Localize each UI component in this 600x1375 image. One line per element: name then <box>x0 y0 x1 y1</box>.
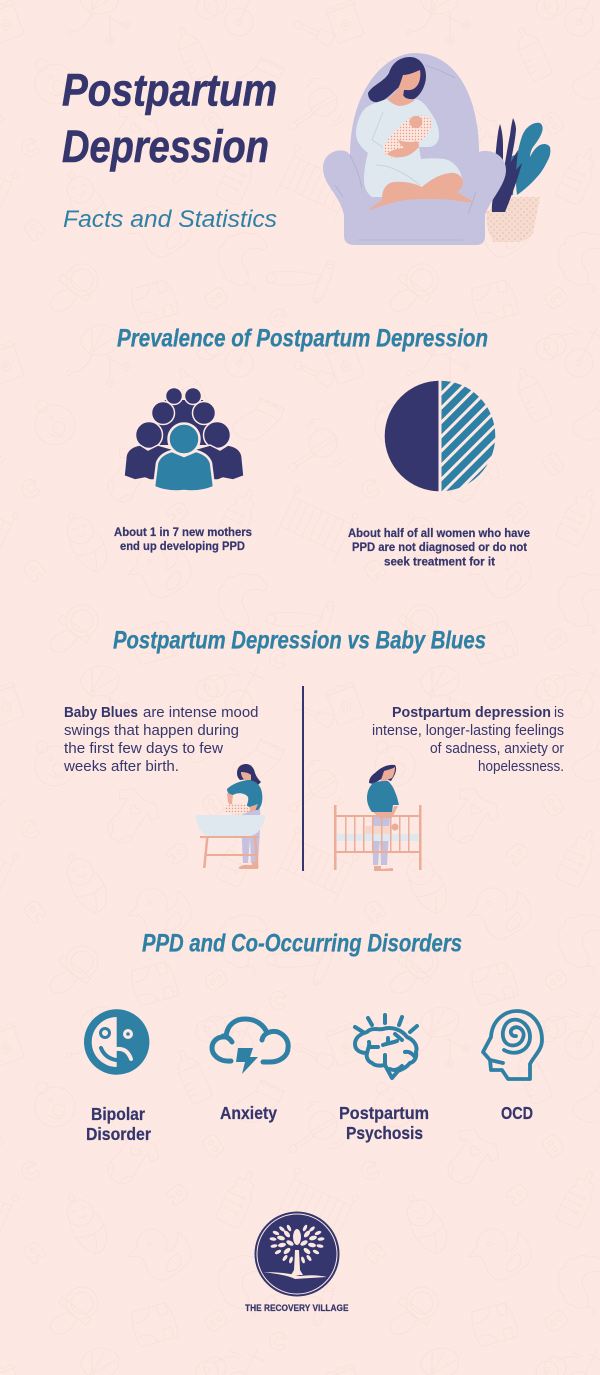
subtitle: Facts and Statistics <box>63 206 277 233</box>
text: baby blues: Baby Blues <box>64 705 138 721</box>
label: postpartum psychosis: Postpartum <box>339 1103 429 1123</box>
text: baby blues <box>63 705 258 775</box>
icon: storm cloud <box>212 1019 288 1074</box>
illustration: mother at crib <box>334 765 422 871</box>
label: anxiety: Anxiety <box>220 1103 277 1123</box>
stat text: half of women: PPD are not diagnosed or do not <box>352 542 527 554</box>
stat text: half of women: seek treatment for it <box>384 556 495 568</box>
stat text: half of women: About half of all women who have <box>348 528 530 540</box>
text: baby blues: weeks after birth. <box>63 759 179 775</box>
label: postpartum psychosis: Psychosis <box>346 1123 423 1143</box>
icon: group of people <box>124 388 244 492</box>
heading: vs baby blues: Postpartum Depression vs Baby Blues <box>113 626 486 654</box>
text: baby blues: swings that happen during <box>64 723 239 739</box>
icon: plant <box>486 118 550 242</box>
stat text: 1 in 7 <box>114 527 252 553</box>
stat text: half of women <box>348 528 530 568</box>
divider <box>302 686 304 871</box>
illustration: mother at changing table <box>196 764 265 869</box>
text: postpartum depression: hopelessness. <box>478 759 564 775</box>
text: postpartum depression: of sadness, anxiety or <box>430 741 564 757</box>
icon: head with spiral <box>483 1011 542 1079</box>
title: Postpartum <box>62 64 277 116</box>
text: postpartum depression: Postpartum depression <box>392 705 551 721</box>
icon: armchair <box>323 53 506 245</box>
stat text: 1 in 7: end up developing PPD <box>120 541 245 553</box>
heading: co-occurring: PPD and Co-Occurring Disorders <box>142 930 462 958</box>
text: postpartum depression: is <box>554 705 564 721</box>
text: postpartum depression <box>372 705 564 775</box>
logo wordmark: THE RECOVERY VILLAGE <box>245 1303 348 1313</box>
label: bipolar: Bipolar <box>91 1104 145 1124</box>
icon: brain with rays <box>355 1015 417 1078</box>
logo: the recovery village <box>245 1212 348 1313</box>
label: ocd: OCD <box>501 1103 533 1123</box>
title: Depression <box>62 121 269 172</box>
icon: mother <box>356 57 475 210</box>
label: postpartum psychosis <box>339 1103 429 1143</box>
illustration: mother nursing in armchair with plant <box>323 53 550 245</box>
stat text: 1 in 7: About 1 in 7 new mothers <box>114 527 252 539</box>
text: baby blues: the first few days to few <box>64 741 224 757</box>
text: postpartum depression: intense, longer-lasting feelings <box>372 723 564 739</box>
heading: prevalence: Prevalence of Postpartum Depression <box>117 324 488 352</box>
text: baby blues: are intense mood <box>143 705 258 721</box>
icon: bipolar face <box>84 1009 149 1075</box>
title <box>62 64 277 172</box>
label: bipolar: Disorder <box>86 1124 151 1144</box>
chart: half pie <box>384 380 496 497</box>
label: bipolar <box>86 1104 151 1144</box>
